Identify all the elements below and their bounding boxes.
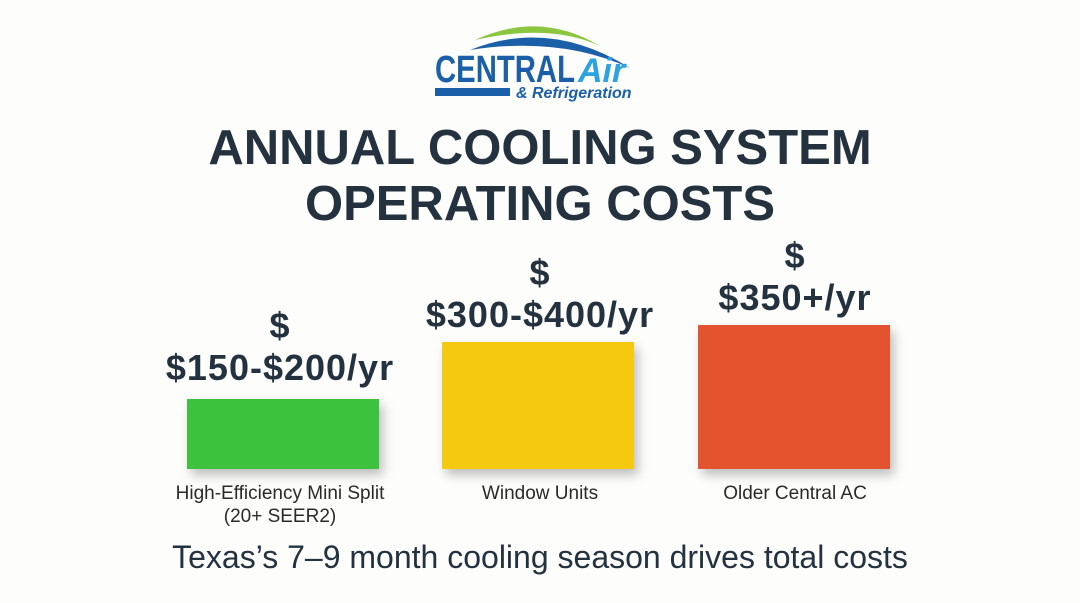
- price label: [426, 252, 654, 335]
- price label: [718, 235, 872, 318]
- logo: Air: [577, 52, 627, 90]
- bar: window units: [426, 252, 654, 504]
- category label: [176, 483, 384, 527]
- price label: $150-$200/yr: [166, 347, 394, 388]
- category label: Window Units: [482, 483, 598, 504]
- category label: (20+ SEER2): [224, 506, 336, 527]
- logo: [435, 26, 632, 102]
- price label: $: [529, 252, 551, 293]
- price label: [166, 305, 394, 388]
- title: ANNUAL COOLING SYSTEM: [208, 121, 872, 175]
- title: OPERATING COSTS: [305, 177, 775, 231]
- title: [208, 121, 872, 231]
- price label: $: [784, 235, 806, 276]
- logo: CENTRAL: [435, 49, 575, 91]
- price label: $300-$400/yr: [426, 294, 654, 335]
- bar: mini split: [166, 305, 394, 527]
- bar: older central: [696, 235, 900, 504]
- logo: & Refrigeration: [516, 85, 632, 102]
- footer caption: Texas’s 7–9 month cooling season drives total costs: [172, 539, 908, 575]
- category label: Older Central AC: [723, 483, 867, 504]
- price label: $: [269, 305, 291, 346]
- price label: $350+/yr: [718, 277, 872, 318]
- category label: High-Efficiency Mini Split: [176, 483, 384, 504]
